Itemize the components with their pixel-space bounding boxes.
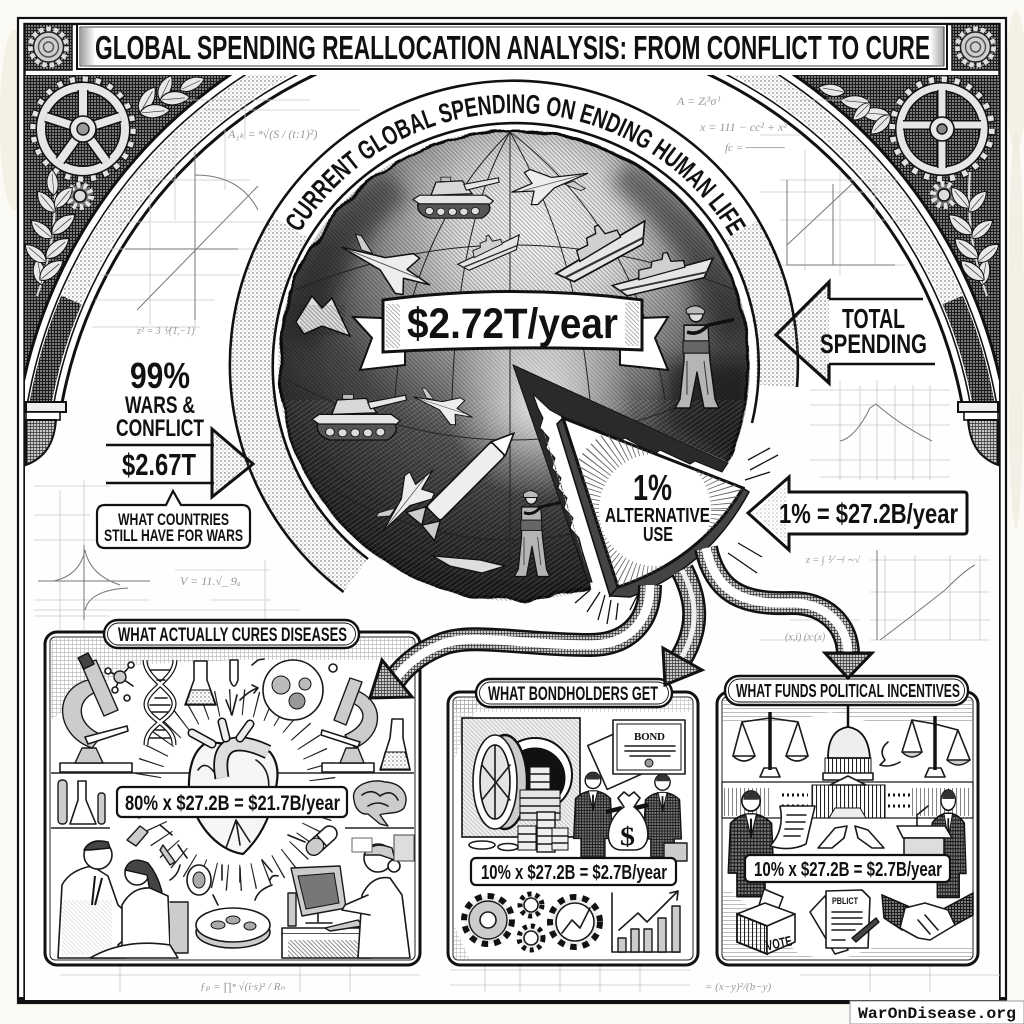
curved arrow to political panel [706, 548, 872, 678]
small gear top right [933, 184, 955, 206]
anatomical heart [189, 722, 277, 854]
graph paper sketch upper right: fc = ───── [725, 142, 785, 154]
1 percent slice [557, 418, 749, 597]
scales right [880, 716, 970, 777]
growth chart [612, 891, 680, 952]
briefcase [664, 843, 687, 861]
gear top right [893, 80, 991, 178]
burning wreck left [296, 296, 350, 336]
businessmen exchange [574, 772, 681, 858]
wars label: $2.67T [122, 447, 196, 482]
corner emblem left [25, 24, 72, 70]
graph paper sketch upper left: z² = 3 ⅟(T,−1) [136, 326, 195, 337]
panel title pill [725, 676, 968, 705]
money bag: $ [620, 822, 635, 851]
formula box: 80% x $27.2B = $21.7B/year [125, 792, 340, 815]
slice text: 1% [633, 467, 672, 508]
callout what countries still have: WHAT COUNTRIES [118, 510, 229, 529]
destroyer upper right [545, 205, 655, 287]
lab worker [342, 835, 414, 958]
microscope right [321, 678, 378, 772]
policy document: PBLICT [832, 896, 858, 906]
watermark [850, 1001, 1024, 1024]
flask right [380, 719, 410, 770]
corner emblem right [952, 24, 999, 70]
panel title pill: WHAT ACTUALLY CURES DISEASES [118, 625, 347, 646]
vault [462, 718, 580, 837]
ballot box [737, 889, 795, 954]
dna helix [145, 660, 175, 745]
panel title pill [104, 620, 359, 648]
rays below heart [160, 825, 305, 882]
curved arrow to cures panel [370, 585, 650, 698]
graph paper sketch upper left [92, 100, 360, 337]
test tube and arrow [226, 660, 258, 715]
watermark: WarOnDisease.org [858, 1005, 1016, 1023]
slice text [605, 467, 710, 546]
slice text: USE [643, 524, 673, 546]
value ribbon [353, 292, 668, 370]
callout what countries still have: STILL HAVE FOR WARS [104, 526, 243, 545]
wars label: 99% [130, 355, 190, 396]
sketch lower right [760, 550, 990, 643]
curved ring heading: CURRENT GLOBAL SPENDING ON ENDING HUMAN LIFE [286, 94, 746, 236]
small ship centre [452, 225, 524, 273]
title bar [25, 24, 999, 70]
sketch bottom margin: ƒₚ = ∏ⁿ √(i·s)² / Rₙ [200, 981, 285, 993]
doctor and patient [58, 841, 188, 958]
arrow total spending [776, 282, 935, 383]
soldier right [675, 306, 734, 408]
missile bottom [433, 556, 505, 573]
title panel [77, 24, 947, 69]
graph paper sketch upper left: A₁ₖ = ⁿ√(S / (t:1)²) [227, 127, 317, 141]
tank top [413, 177, 499, 218]
handshake [882, 893, 973, 940]
monitor and desk [282, 866, 372, 958]
bond certificates: BOND [634, 731, 665, 743]
formula box [471, 858, 676, 885]
wars label: CONFLICT [116, 415, 204, 442]
aircraft centre [409, 384, 477, 430]
panel: what bondholders get [448, 679, 698, 965]
policy document [810, 890, 879, 954]
panel: what funds political incentives [717, 676, 978, 965]
petri cells [252, 659, 337, 720]
ballot box: VOTE [764, 932, 793, 954]
bell curve sketch right [810, 380, 950, 480]
slice text: ALTERNATIVE [605, 505, 710, 527]
panel: what actually cures diseases [45, 620, 420, 965]
panel title pill [476, 679, 672, 707]
molecule [105, 662, 134, 701]
wars label [116, 355, 204, 482]
sketch bottom margin: = (x−y)²/(b−y) [705, 981, 772, 993]
globe [278, 130, 750, 602]
petri dish [196, 908, 270, 948]
right capital [958, 402, 998, 465]
graph paper sketch upper right [676, 94, 910, 275]
man with scroll [728, 791, 815, 897]
formula box: 10% x $27.2B = $2.7B/year [754, 859, 942, 881]
tank lower left [312, 394, 406, 440]
sketch bottom margin [60, 965, 1000, 993]
formula box [745, 855, 950, 882]
curved arrow to bondholders panel [663, 570, 702, 685]
capsule [303, 823, 340, 858]
laurel left horizontal [134, 73, 207, 119]
wars label: WARS & [125, 392, 195, 419]
coin stacks [469, 767, 568, 852]
value text: $2.72T/year [407, 300, 618, 348]
bond certificates [588, 720, 685, 789]
sketch lower left [34, 480, 300, 640]
warship right [608, 243, 717, 298]
arrow label: 1% = $27.2B/year [779, 498, 958, 529]
fighter jet top right [507, 155, 592, 210]
sketch lower right: z = ∫ ⅟ ⊣ ∼√ [805, 555, 861, 566]
heart rays [147, 702, 323, 878]
jet lower left [370, 459, 446, 542]
laurel left vertical [21, 169, 79, 296]
gear top left [34, 80, 132, 178]
gears row [464, 894, 600, 950]
left capital [26, 402, 66, 465]
small cells and arrows [127, 826, 278, 905]
brain [354, 781, 406, 826]
laurel right horizontal [817, 82, 895, 139]
sketch lower right: (x,i) (x·(x) [785, 632, 826, 643]
arrow label: SPENDING [820, 329, 927, 359]
flask top [185, 661, 216, 705]
missile [406, 419, 528, 541]
podium and speaker [897, 790, 966, 897]
burst lines around slice [575, 448, 778, 624]
laurel right vertical [944, 172, 1002, 296]
arrow one percent [748, 477, 967, 550]
stippled ring around globe [230, 81, 798, 592]
fighter jet left [334, 228, 438, 304]
hands [818, 826, 884, 848]
arrow label [820, 303, 927, 359]
test tubes [58, 780, 105, 824]
formula box [117, 787, 347, 817]
money bag [608, 792, 648, 851]
panel title pill: WHAT BONDHOLDERS GET [488, 684, 658, 705]
graph paper sketch upper right: A = Zᵢ³σ⁾ [676, 94, 720, 108]
scales left [733, 712, 808, 777]
graph paper sketch upper right: x = 111 − cc² + x² [699, 120, 787, 134]
soldier bottom [514, 491, 562, 576]
arrow wars and conflict [106, 355, 253, 497]
sketch lower left: V = 11.√_ 9ₐ [180, 574, 241, 588]
microscope left [60, 653, 132, 772]
small gear top left [69, 185, 91, 207]
formula box: 10% x $27.2B = $2.7B/year [481, 862, 667, 884]
capitol [722, 706, 973, 818]
cut-out wedge in globe [513, 365, 755, 600]
callout what countries still have [97, 491, 250, 548]
arrow label: TOTAL [842, 303, 905, 334]
